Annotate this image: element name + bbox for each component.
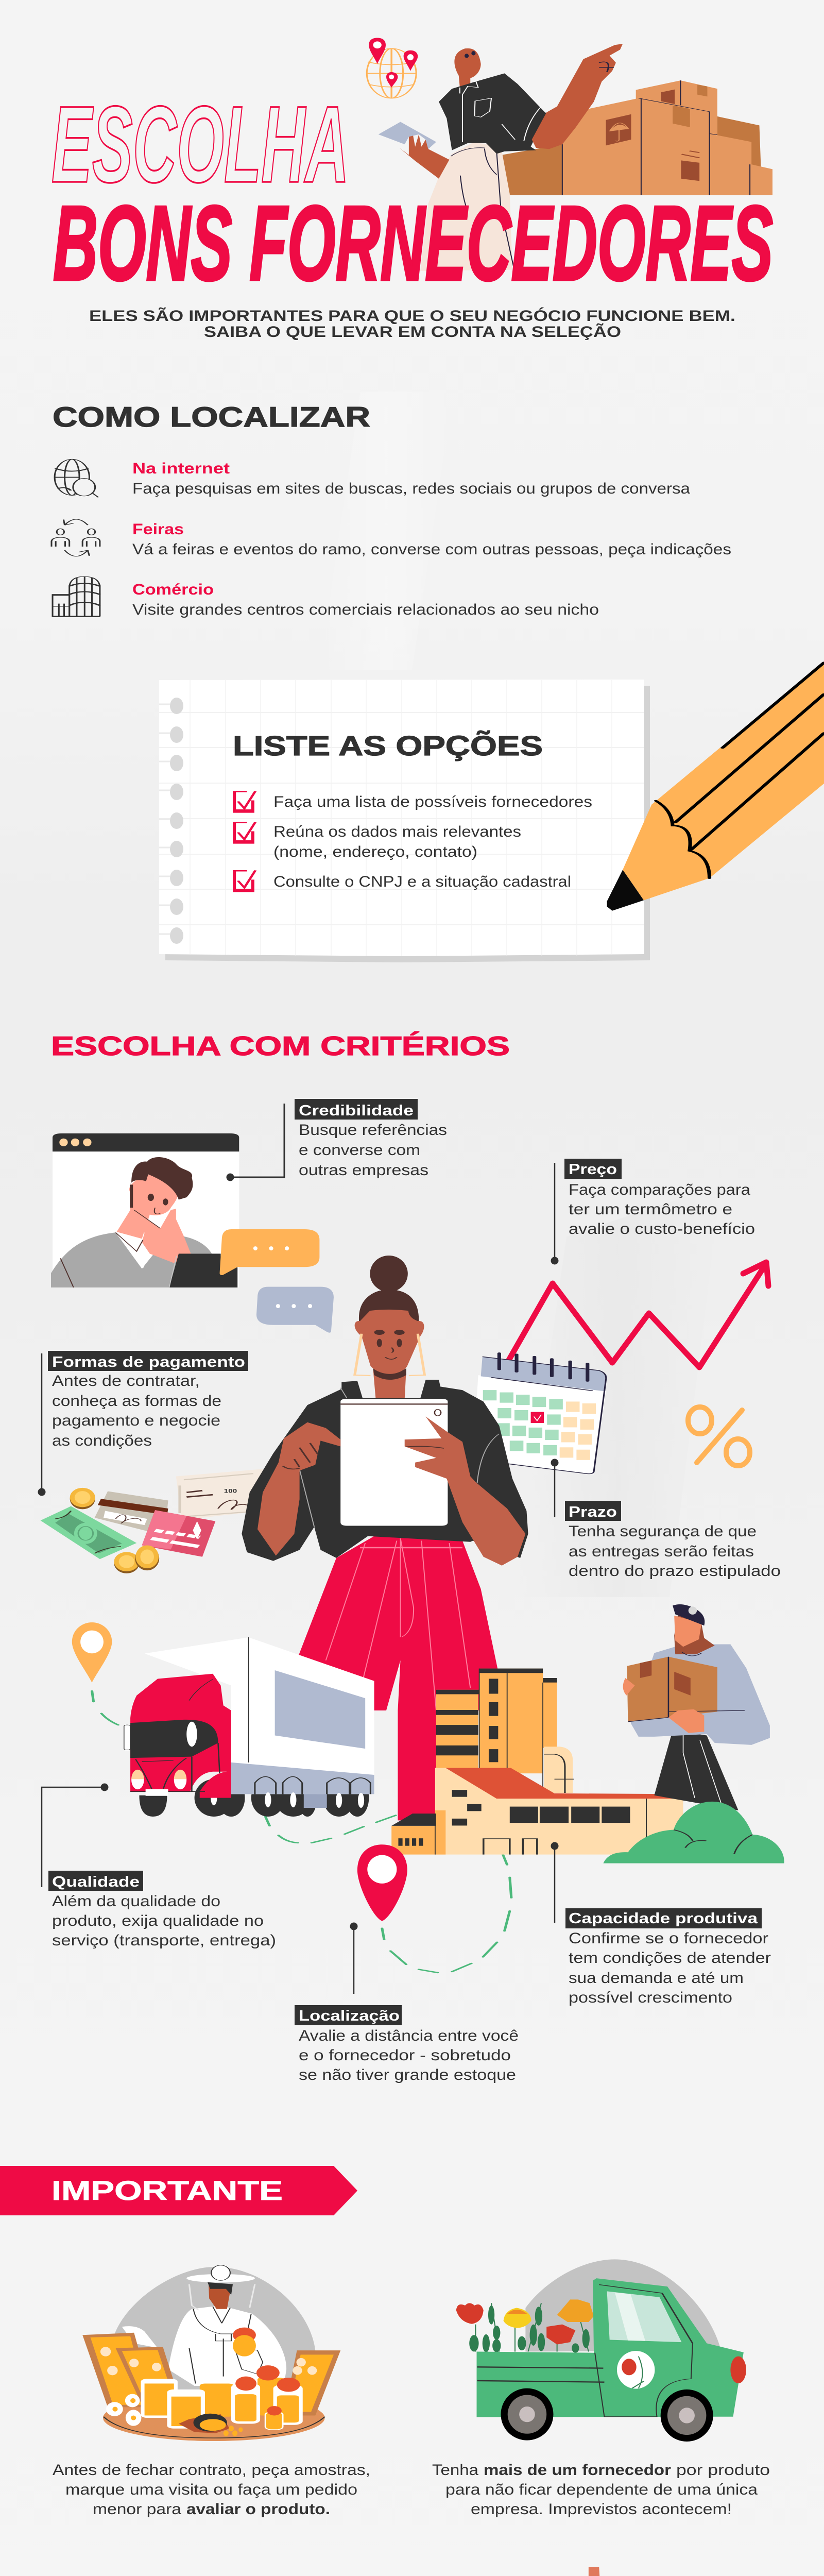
connector xyxy=(38,1353,45,1496)
flowers xyxy=(456,2299,594,2353)
icon: people exchange xyxy=(52,519,100,556)
description xyxy=(299,1122,447,1179)
woman with raised hand xyxy=(505,2567,612,2576)
text: comercio: Comércio xyxy=(132,581,214,598)
description: se não tiver grande estoque xyxy=(299,2066,516,2083)
description: e converse com xyxy=(299,1142,420,1159)
description: Além da qualidade do xyxy=(52,1893,220,1910)
description xyxy=(569,1181,755,1238)
description: dentro do prazo estipulado xyxy=(569,1563,781,1580)
text: tenha mais de um: Tenha xyxy=(432,2462,478,2479)
icon: shopping building xyxy=(53,577,100,617)
label xyxy=(565,1501,621,1521)
icon: percent xyxy=(688,1407,750,1466)
text: antes de fechar: marque uma visita ou faça um pedido xyxy=(65,2481,357,2498)
description: produto, exija qualidade no xyxy=(52,1912,264,1929)
illustration: cardboard boxes xyxy=(502,80,772,195)
label xyxy=(48,1351,248,1371)
illustration: man at browser window xyxy=(51,1133,239,1287)
heading: liste as opcoes: LISTE AS OPÇÕES xyxy=(233,731,543,761)
text: antes de fechar: menor para xyxy=(93,2501,181,2518)
item: consulte o cnpj: Consulte o CNPJ e a situação cadastral xyxy=(273,873,571,890)
illustration: woman with tablet xyxy=(242,1256,528,1820)
item: reuna os dados: Reúna os dados mais relevantes xyxy=(273,823,521,840)
figure: man xyxy=(379,44,623,271)
text: tenha mais de um: mais de um fornecedor xyxy=(484,2462,671,2479)
description: ter um termômetro e xyxy=(569,1201,732,1218)
arms xyxy=(258,1416,525,1566)
text: feiras xyxy=(132,521,731,558)
frames xyxy=(82,2333,155,2407)
text: tenha mais de um: para não ficar dependente de uma única xyxy=(445,2481,758,2498)
illustration: green truck with flowers xyxy=(456,2259,746,2442)
cab xyxy=(124,1674,231,1798)
chart: price line xyxy=(497,1262,768,1381)
description xyxy=(569,1930,771,2006)
connector xyxy=(551,1842,558,1923)
callout: capacidade produtiva xyxy=(551,1842,771,2006)
description: avalie o custo-benefício xyxy=(569,1221,755,1238)
label xyxy=(48,1871,143,1891)
icon: checkbox 3 xyxy=(234,870,255,891)
banner: importante: IMPORTANTE xyxy=(52,2176,283,2206)
callout: localizacao xyxy=(295,1923,519,2083)
item: faca uma lista: Faça uma lista de possíveis fornecedores xyxy=(273,793,592,810)
text: na internet: Na internet xyxy=(132,460,230,477)
text: tenha mais de um xyxy=(432,2462,770,2518)
description: possível crescimento xyxy=(569,1989,732,2006)
description: outras empresas xyxy=(299,1162,428,1179)
description xyxy=(52,1372,221,1449)
banner: importante xyxy=(0,2166,357,2215)
icon: checkbox 1 xyxy=(234,791,255,812)
description: serviço (transporte, entrega) xyxy=(52,1932,276,1949)
description: Avalie a distância entre você xyxy=(299,2027,519,2044)
text: comercio: Visite grandes centros comerciais relacionados ao seu nicho xyxy=(132,601,599,618)
illustration: money and cards xyxy=(41,1469,263,1573)
description: conheça as formas de xyxy=(52,1393,221,1410)
connector xyxy=(227,1104,284,1181)
illustration: man pointing with boxes and globe xyxy=(366,38,772,271)
icon: orange speech bubble xyxy=(220,1229,319,1275)
text: antes de fechar: avaliar o produto. xyxy=(186,2501,330,2518)
title: escolha: ESCOLHA xyxy=(52,83,349,205)
panel: notebook paper xyxy=(159,680,650,962)
illustration: team with database board xyxy=(494,2567,711,2576)
description: e o fornecedor - sobretudo xyxy=(299,2047,511,2064)
text: na internet xyxy=(132,460,690,497)
text: tenha mais de um: empresa. Imprevistos acontecem! xyxy=(471,2501,732,2518)
honey bowl and flowers xyxy=(179,2414,230,2433)
wheels xyxy=(501,2388,553,2441)
label: Prazo xyxy=(569,1504,617,1520)
description: as condições xyxy=(52,1432,152,1449)
label xyxy=(564,1159,622,1179)
text: antes de fechar xyxy=(53,2462,370,2518)
description: as entregas serão feitas xyxy=(569,1543,754,1560)
callout: qualidade xyxy=(42,1784,276,1949)
description xyxy=(299,2027,519,2083)
hair and face xyxy=(355,1256,424,1399)
label: Capacidade produtiva xyxy=(569,1910,758,1927)
illustration: calendar xyxy=(473,1353,607,1475)
jars xyxy=(141,2328,303,2430)
icon: bush xyxy=(603,1802,784,1863)
callout: preco xyxy=(551,1159,755,1264)
text: tenha mais de um: por produto xyxy=(676,2462,770,2479)
callout: credibilidade xyxy=(227,1099,447,1181)
heading: como localizar: COMO LOCALIZAR xyxy=(53,401,370,433)
label: Credibilidade xyxy=(299,1103,414,1119)
description: pagamento e negocie xyxy=(52,1412,220,1429)
tablet xyxy=(340,1399,448,1526)
label: Qualidade xyxy=(52,1874,140,1890)
icon: checkbox 2 xyxy=(234,822,255,843)
checklist xyxy=(234,791,592,891)
description xyxy=(569,1523,781,1580)
icon: red map pin xyxy=(357,1844,407,1921)
callout: formas de pagamento xyxy=(38,1351,248,1496)
description: Faça comparações para xyxy=(569,1181,750,1198)
description: Confirme se o fornecedor xyxy=(569,1930,768,1947)
description: Tenha segurança de que xyxy=(569,1523,757,1540)
wheels xyxy=(139,1779,369,1817)
label: Formas de pagamento xyxy=(52,1354,245,1370)
label: Localização xyxy=(299,2008,400,2024)
label: Preço xyxy=(569,1161,617,1178)
text: antes de fechar: Antes de fechar contrato, peça amostras, xyxy=(53,2462,370,2479)
description xyxy=(52,1893,276,1949)
connector xyxy=(350,1923,357,1994)
label xyxy=(565,1908,762,1928)
text: feiras: Vá a feiras e eventos do ramo, converse com outras pessoas, peça indicações xyxy=(132,541,731,558)
connector xyxy=(551,1459,558,1517)
connector xyxy=(42,1784,108,1887)
text: comercio xyxy=(132,581,599,618)
label xyxy=(295,1099,418,1120)
item: reuna os dados xyxy=(273,823,521,860)
route: dashed green paths xyxy=(92,1691,511,1973)
icon: blue speech bubble xyxy=(256,1287,334,1333)
heading: escolha com criterios: ESCOLHA COM CRITÉRIOS xyxy=(51,1031,510,1061)
illustration: delivery man xyxy=(623,1604,770,1810)
label xyxy=(295,2005,402,2025)
illustration: beekeeper with honey xyxy=(82,2265,340,2441)
trousers xyxy=(299,1536,502,1820)
item: reuna os dados: (nome, endereço, contato) xyxy=(273,843,477,860)
description: sua demanda e até um xyxy=(569,1970,744,1987)
illustration: delivery truck xyxy=(124,1637,374,1817)
icon: globe with pins xyxy=(366,38,418,98)
black top xyxy=(242,1380,528,1561)
illustration: factory building xyxy=(391,1669,683,1855)
icon: globe search xyxy=(55,459,98,497)
text: feiras: Feiras xyxy=(132,521,184,538)
description: Busque referências xyxy=(299,1122,447,1139)
illustration: pencil xyxy=(607,663,824,911)
text: na internet: Faça pesquisas em sites de buscas, redes sociais ou grupos de conversa xyxy=(132,480,690,497)
subtitle xyxy=(89,307,735,341)
description: Antes de contratar, xyxy=(52,1372,200,1389)
trailer xyxy=(145,1637,374,1794)
icon: orange map pin xyxy=(72,1622,112,1683)
illustration: money and cards: 100 xyxy=(224,1488,237,1494)
connector xyxy=(551,1163,558,1264)
description: tem condições de atender xyxy=(569,1950,771,1967)
callout: prazo xyxy=(551,1459,781,1580)
subtitle: SAIBA O QUE LEVAR EM CONTA NA SELEÇÃO xyxy=(204,323,621,341)
figure xyxy=(122,2265,286,2386)
subtitle: ELES SÃO IMPORTANTES PARA QUE O SEU NEGÓCIO FUNCIONE BEM. xyxy=(89,307,735,325)
